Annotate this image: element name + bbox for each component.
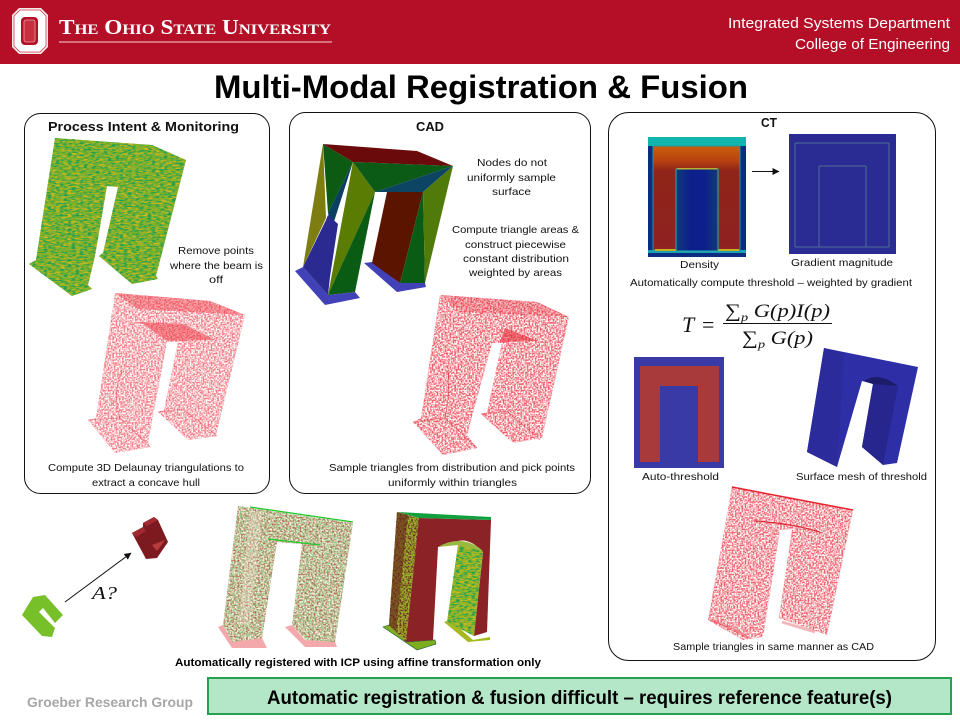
formula: p <box>757 337 765 351</box>
arrow: density to gradient <box>752 170 779 172</box>
label: gradient magnitude: Gradient magnitude <box>791 257 893 269</box>
auto-threshold slice <box>634 357 724 468</box>
note: nodes: Nodes do not <box>477 157 547 169</box>
department text: Integrated Systems Department <box>728 15 951 32</box>
overlay of registered point clouds <box>218 506 353 648</box>
formula: = <box>702 312 714 337</box>
label: surface mesh: Surface mesh of threshold <box>796 471 927 483</box>
note: nodes: surface <box>492 186 531 198</box>
caption: ICP registration: Automatically registered with ICP using affine transformation only <box>175 657 542 669</box>
note: nodes: uniformly sample <box>467 172 556 184</box>
red CT point cloud <box>708 487 853 640</box>
department text: College of Engineering <box>795 36 950 53</box>
callout: Automatic registration & fusion difficult – requires reference feature(s) <box>267 688 892 709</box>
caption: Delaunay <box>48 462 244 489</box>
label: auto-threshold: Auto-threshold <box>642 471 719 483</box>
title: Multi-Modal Registration & Fusion <box>214 69 748 105</box>
formula: G(p)I(p) <box>748 301 830 322</box>
note: remove points: Remove points <box>178 245 254 257</box>
icon: green part <box>22 595 63 637</box>
panel: CAD <box>290 112 590 494</box>
gradient magnitude slice <box>789 134 896 254</box>
formula: G(p) <box>765 328 813 349</box>
caption: sampling: uniformly within triangles <box>388 477 517 489</box>
formula: ∑ <box>742 328 756 349</box>
caption: Delaunay: Compute 3D Delaunay triangulations to <box>48 462 244 474</box>
note: triangle areas: Compute triangle areas & <box>452 224 579 236</box>
note: triangle areas: weighted by areas <box>468 267 562 279</box>
note: remove points: where the beam is <box>169 260 263 272</box>
caption: sampling: Sample triangles from distribution and pick points <box>329 462 575 474</box>
footer: research group: Groeber Research Group <box>27 694 193 710</box>
note: remove points <box>169 245 263 286</box>
formula <box>682 301 832 351</box>
note: triangle areas: construct piecewise <box>465 239 566 251</box>
density slice <box>648 137 746 257</box>
panel heading: CT <box>761 115 777 130</box>
icon: red part <box>132 517 168 559</box>
wordmark: The Ohio State University <box>59 15 331 39</box>
fused CT and monitoring model <box>383 512 491 650</box>
red sampled point cloud <box>413 295 569 455</box>
arrow: transformation <box>65 553 131 602</box>
red concave hull point cloud <box>88 293 245 453</box>
label: density: Density <box>680 259 720 271</box>
note: threshold: Automatically compute threshold – weighted by gradient <box>630 277 912 289</box>
CAD triangulated mesh <box>295 144 453 305</box>
registration diagram <box>22 517 168 637</box>
green process point cloud <box>29 138 186 296</box>
caption: sampling <box>329 462 575 489</box>
note: remove points: off <box>209 274 223 286</box>
panel heading: CAD <box>416 119 444 134</box>
panel heading: Process Intent & Monitoring <box>48 119 239 134</box>
surface mesh of threshold <box>807 348 918 467</box>
caption: sample triangles: Sample triangles in same manner as CAD <box>673 641 874 653</box>
department text <box>728 15 951 53</box>
note: triangle areas: constant distribution <box>463 253 569 265</box>
formula: p <box>740 310 748 324</box>
formula: ∑ <box>725 301 739 322</box>
icon: Ohio State block O logo <box>12 8 48 54</box>
label: A?: A? <box>91 583 117 603</box>
formula: T <box>682 312 696 337</box>
panel: CT <box>608 112 936 660</box>
panel: process intent and monitoring <box>24 114 270 494</box>
caption: Delaunay: extract a concave hull <box>92 477 200 489</box>
callout <box>208 678 951 714</box>
header band <box>0 0 960 64</box>
note: nodes <box>467 157 556 198</box>
note: triangle areas <box>452 224 579 279</box>
